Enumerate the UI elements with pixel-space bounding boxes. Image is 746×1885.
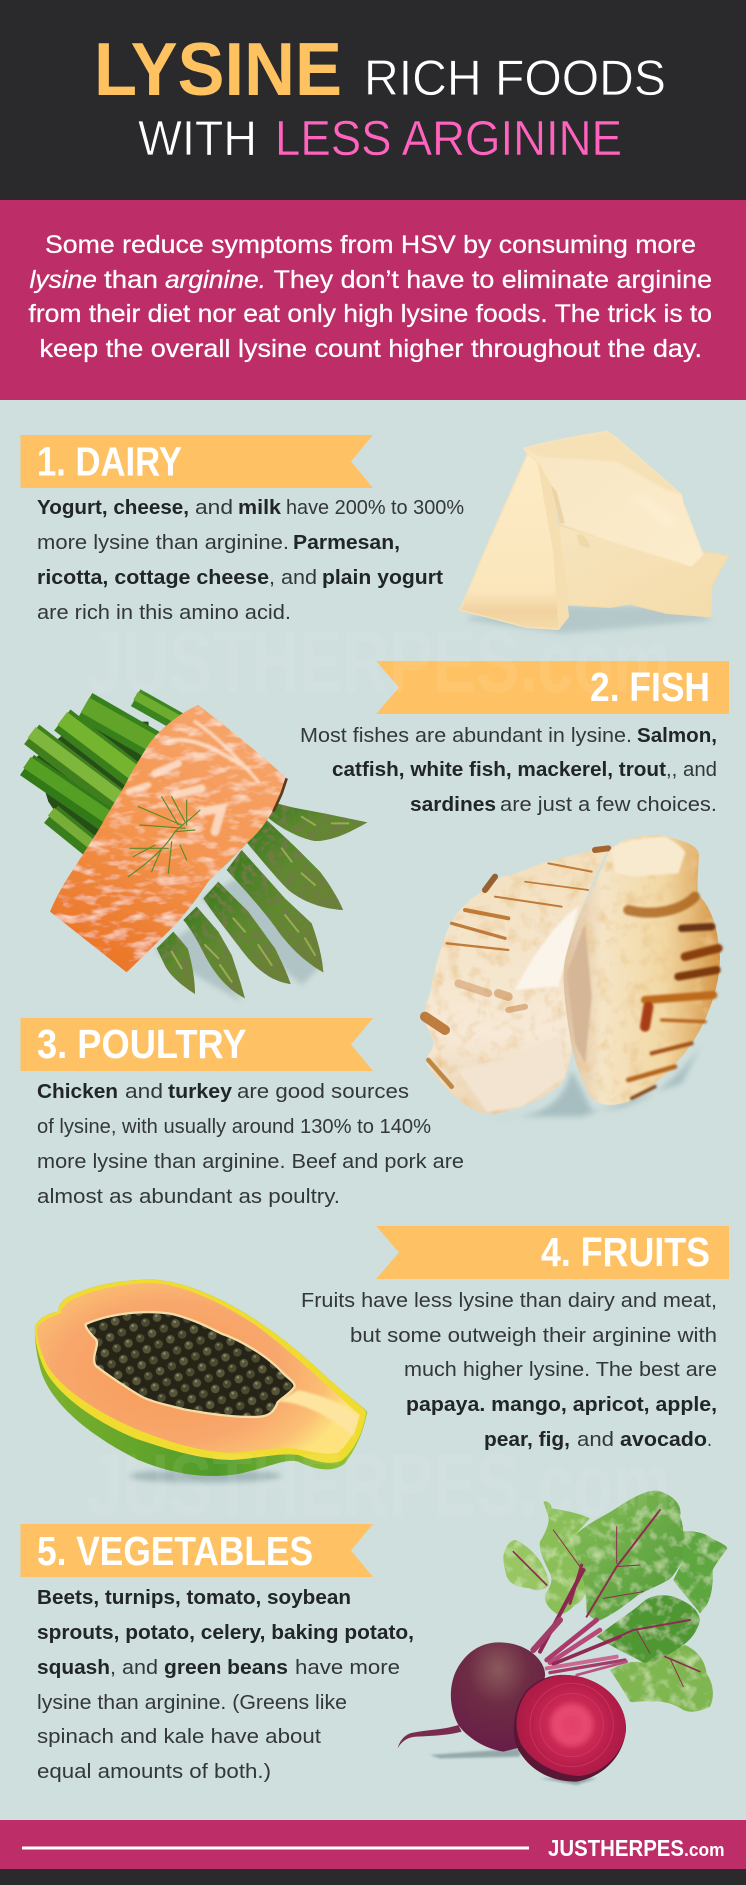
banner: 2. Fish [376, 661, 729, 714]
section 1: dairy [20, 432, 728, 633]
panel: footer [0, 1820, 746, 1885]
poultry text: turkey [168, 1080, 233, 1103]
image: beetroot with leaves [398, 1491, 727, 1785]
beet leaves [503, 1491, 727, 1712]
asparagus [27, 696, 367, 1002]
fish text: ,, and [666, 758, 717, 781]
fruits text: but some outweigh their arginine with [350, 1324, 717, 1347]
intro text: keep the overall lysine count higher throughout the day. [40, 335, 702, 363]
dairy text [37, 496, 464, 624]
fish text [300, 724, 717, 816]
title: LYSINE [94, 27, 342, 111]
section 5: vegetables [20, 1491, 727, 1785]
vegetables text: lysine than arginine. (Greens like [37, 1691, 347, 1714]
fish text: Salmon, [637, 724, 717, 747]
banner: 1. Dairy: 1. DAIRY [37, 438, 182, 484]
banner: 3. Poultry: 3. POULTRY [37, 1021, 246, 1067]
beet stems [533, 1570, 627, 1675]
image: grilled chicken breasts [425, 835, 720, 1117]
intro text: lysine [30, 266, 97, 294]
poultry text [37, 1080, 464, 1208]
poultry text: are good sources [237, 1080, 409, 1103]
dill sprig [128, 797, 200, 877]
right breast [564, 835, 720, 1105]
fish text: are just a few choices. [500, 793, 717, 816]
fish text: sardines [410, 793, 496, 816]
poultry text: of lysine, with usually around 130% to 140% [37, 1115, 431, 1138]
dairy text: have 200% to 300% [286, 496, 464, 519]
dairy text: plain yogurt [322, 566, 443, 589]
intro text [28, 231, 712, 363]
vegetables text: Beets, turnips, tomato, soybean [37, 1586, 351, 1609]
dairy text: ricotta, cottage cheese [37, 566, 269, 589]
shadows [430, 1748, 597, 1785]
poultry text: and [125, 1080, 163, 1103]
intro text: Some reduce symptoms from HSV by consuming more [45, 231, 696, 259]
panel: introduction [0, 200, 746, 400]
whole beet [398, 1642, 545, 1752]
banner: 1. Dairy [20, 435, 373, 488]
left breast [425, 846, 610, 1114]
intro text: They don’t have to eliminate arginine [274, 266, 712, 294]
fruits text: Fruits have less lysine than dairy and meat, [301, 1289, 717, 1312]
section 3: poultry [20, 835, 720, 1208]
cut beet half [514, 1675, 626, 1782]
dairy text: Parmesan, [293, 531, 400, 554]
poultry text: Chicken [37, 1080, 118, 1103]
vegetables text: have more [295, 1656, 400, 1679]
fruits text: much higher lysine. The best are [404, 1358, 717, 1381]
banner: 4. Fruits: 4. FRUITS [541, 1229, 710, 1275]
vegetables text: green beans [164, 1656, 288, 1679]
image: salmon on asparagus [27, 696, 367, 1002]
intro text: from their diet nor eat only high lysine foods. The trick is to [28, 300, 712, 328]
banner: 2. Fish: 2. FISH [590, 664, 710, 710]
section 2: fish [27, 661, 729, 1002]
dairy text: are rich in this amino acid. [37, 601, 291, 624]
vegetables text: , and [110, 1656, 158, 1679]
banner: 5. Vegetables: 5. VEGETABLES [37, 1528, 313, 1574]
title: WITH [138, 112, 257, 166]
vegetables text: squash [37, 1656, 110, 1679]
fruits text: papaya. mango, apricot, apple, [406, 1393, 717, 1416]
fish text: catfish, white fish, mackerel, trout [332, 758, 666, 781]
vegetables text: spinach and kale have about [37, 1725, 321, 1748]
fruits text [301, 1289, 717, 1451]
poultry text: more lysine than arginine. Beef and pork are [37, 1150, 464, 1173]
intro text: arginine. [165, 266, 266, 294]
footer logo: .com [684, 1840, 724, 1860]
panel: title header [0, 0, 746, 200]
title: LESS ARGININE [275, 112, 622, 166]
title [94, 27, 666, 166]
poultry text: almost as abundant as poultry. [37, 1185, 340, 1208]
dairy text: Yogurt, cheese, [37, 496, 189, 519]
vegetables text: sprouts, potato, celery, baking potato, [37, 1621, 414, 1644]
fish text: Most fishes are abundant in lysine. [300, 724, 632, 747]
fruits text: and [577, 1428, 614, 1451]
image: cheese wedges [460, 432, 728, 633]
image: papaya half [35, 1280, 367, 1483]
dairy text: and [195, 496, 233, 519]
banner: 3. Poultry [20, 1018, 373, 1071]
fruits text: avocado [620, 1428, 707, 1451]
dairy text: more lysine than arginine. [37, 531, 289, 554]
dairy text: milk [238, 496, 282, 519]
vegetables text: equal amounts of both.) [37, 1760, 271, 1783]
intro text: than [104, 266, 158, 294]
salmon fillet [50, 705, 287, 972]
fruits text: pear, fig, [484, 1428, 570, 1451]
banner: 4. Fruits [376, 1226, 729, 1279]
section 4: fruits [35, 1226, 729, 1483]
vegetables text [37, 1586, 414, 1783]
footer logo: JUSTHERPES [548, 1835, 684, 1861]
fruits text: . [707, 1428, 712, 1451]
dairy text: , and [269, 566, 317, 589]
title: RICH FOODS [364, 50, 666, 106]
